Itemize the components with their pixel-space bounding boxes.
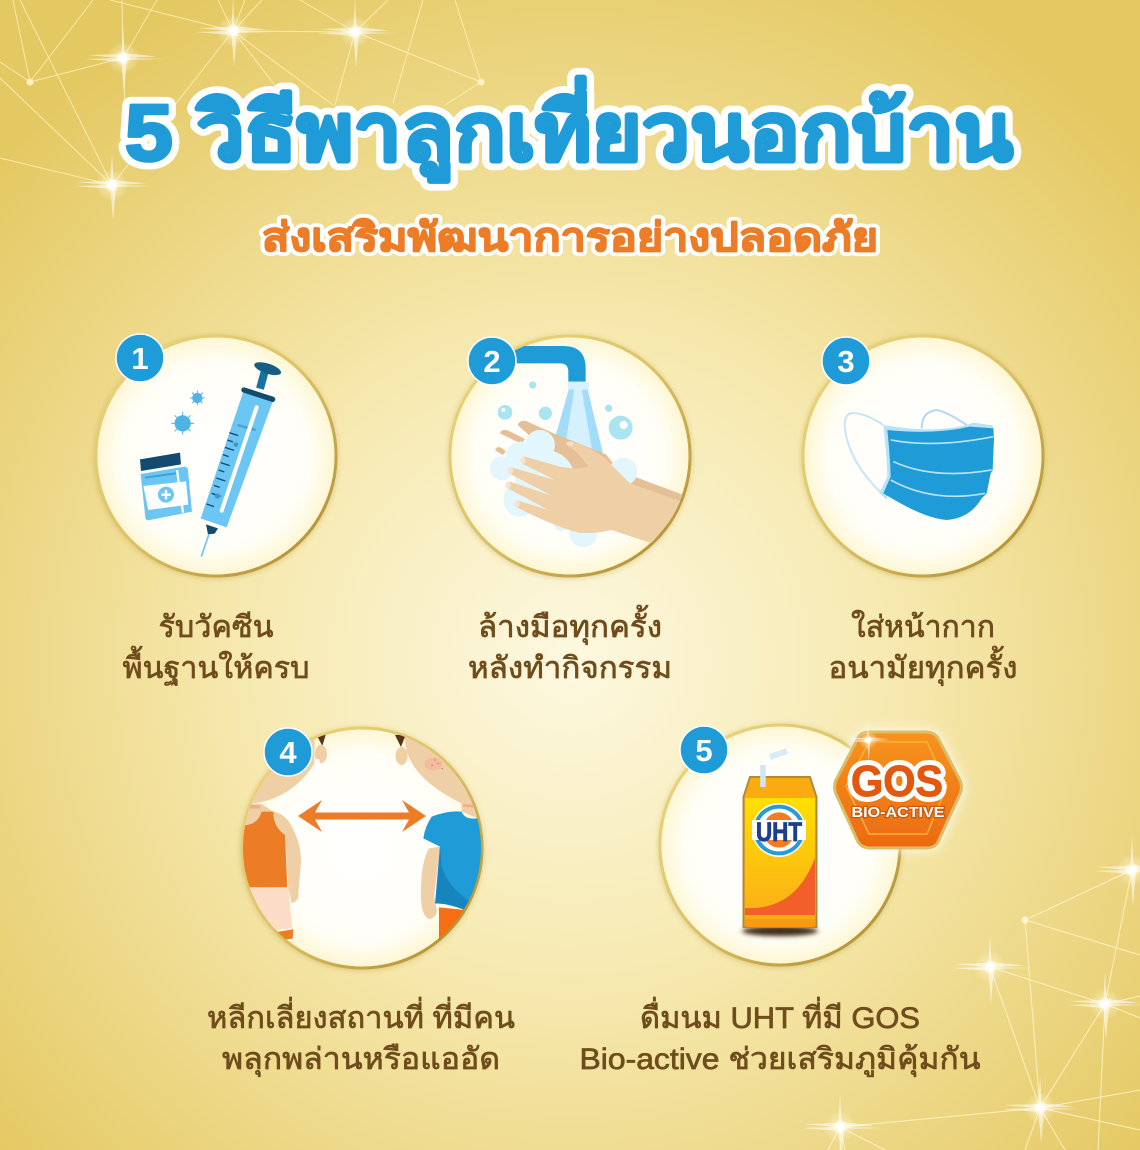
badge 1: 1: [131, 341, 149, 376]
icon: vial: [140, 453, 192, 520]
icon: GOS badge: GOS: [851, 757, 943, 806]
panel: step 2 handwashing: [450, 336, 690, 576]
circle 3: [803, 336, 1043, 576]
circle 4: [242, 728, 482, 968]
icon: soap foam: [490, 430, 637, 547]
icon: fingernails: [506, 442, 574, 507]
circle 1: [96, 336, 336, 576]
badge 3: [822, 337, 870, 385]
title: 5 วิธีพาลูกเที่ยวนอกบ้าน: [125, 76, 1013, 183]
person right: [395, 735, 481, 938]
icon: front hand: [506, 442, 685, 543]
caption 3: อนามัยทุกครั้ง: [828, 646, 1018, 687]
caption 5: ดื่มนม UHT ที่มี GOS: [640, 997, 920, 1035]
caption 5: Bio-active ช่วยเสริมภูมิคุ้มกัน: [580, 1043, 980, 1078]
icon: GOS badge: BIO-ACTIVE: [852, 804, 944, 821]
icon: GOS badge: GOS: [851, 757, 943, 806]
badge 1: [116, 334, 164, 382]
badge 2: 2: [483, 344, 501, 379]
caption 2: [468, 605, 672, 685]
caption 1: พื้นฐานให้ครบ: [122, 646, 310, 686]
decorative network bottom right: [802, 836, 1140, 1150]
subtitle: ส่งเสริมพัฒนาการอย่างปลอดภัย: [262, 216, 878, 260]
icon: faucet and water: [514, 346, 603, 454]
caption 5: [580, 997, 980, 1078]
icon: UHT carton: [742, 751, 818, 936]
circle 5: [660, 725, 900, 965]
caption 3: [828, 610, 1018, 687]
icon: viruses: [171, 391, 205, 435]
captions row 2: [207, 997, 980, 1078]
caption 4: พลุกพล่านหรือแออัด: [222, 1043, 500, 1078]
icon: GOS badge: [834, 720, 962, 848]
badge 4: [264, 728, 312, 776]
badge 5: 5: [695, 733, 713, 768]
arrow: double-headed: [298, 800, 426, 832]
captions row 1: [122, 605, 1018, 687]
caption 1: [122, 611, 310, 686]
badge 3: 3: [837, 344, 855, 379]
caption 4: [207, 997, 515, 1078]
icon: bubbles: [498, 381, 633, 440]
panel: step 3 mask: [803, 336, 1043, 576]
icon: face mask: [845, 410, 994, 520]
icon: handwashing art: [490, 346, 686, 547]
caption 4: หลีกเลี่ยงสถานที่ ที่มีคน: [207, 997, 515, 1035]
decorative network top left: [0, 0, 484, 221]
caption 3: ใส่หน้ากาก: [851, 610, 995, 644]
caption 2: ล้างมือทุกครั้ง: [478, 605, 662, 646]
icon: UHT carton: UHT: [756, 817, 802, 847]
caption 1: รับวัคซีน: [158, 611, 274, 644]
badge 4: 4: [279, 735, 297, 770]
panel: step 1 vaccine: [96, 334, 336, 576]
icon: back hand: [495, 421, 686, 506]
icon: syringe: [201, 360, 283, 557]
badge 5: [680, 726, 728, 774]
title: 5 วิธีพาลูกเที่ยวนอกบ้าน: [125, 76, 1013, 183]
panel: step 4 distancing: [235, 720, 492, 968]
icon: two people: [243, 735, 481, 940]
circle 2: [450, 336, 690, 576]
panel: step 5 UHT milk: [660, 720, 962, 965]
subtitle: ส่งเสริมพัฒนาการอย่างปลอดภัย: [262, 216, 878, 260]
person left: [243, 735, 327, 940]
caption 2: หลังทำกิจกรรม: [468, 652, 672, 685]
badge 2: [468, 337, 516, 385]
icon: vaccine art: [140, 360, 283, 557]
